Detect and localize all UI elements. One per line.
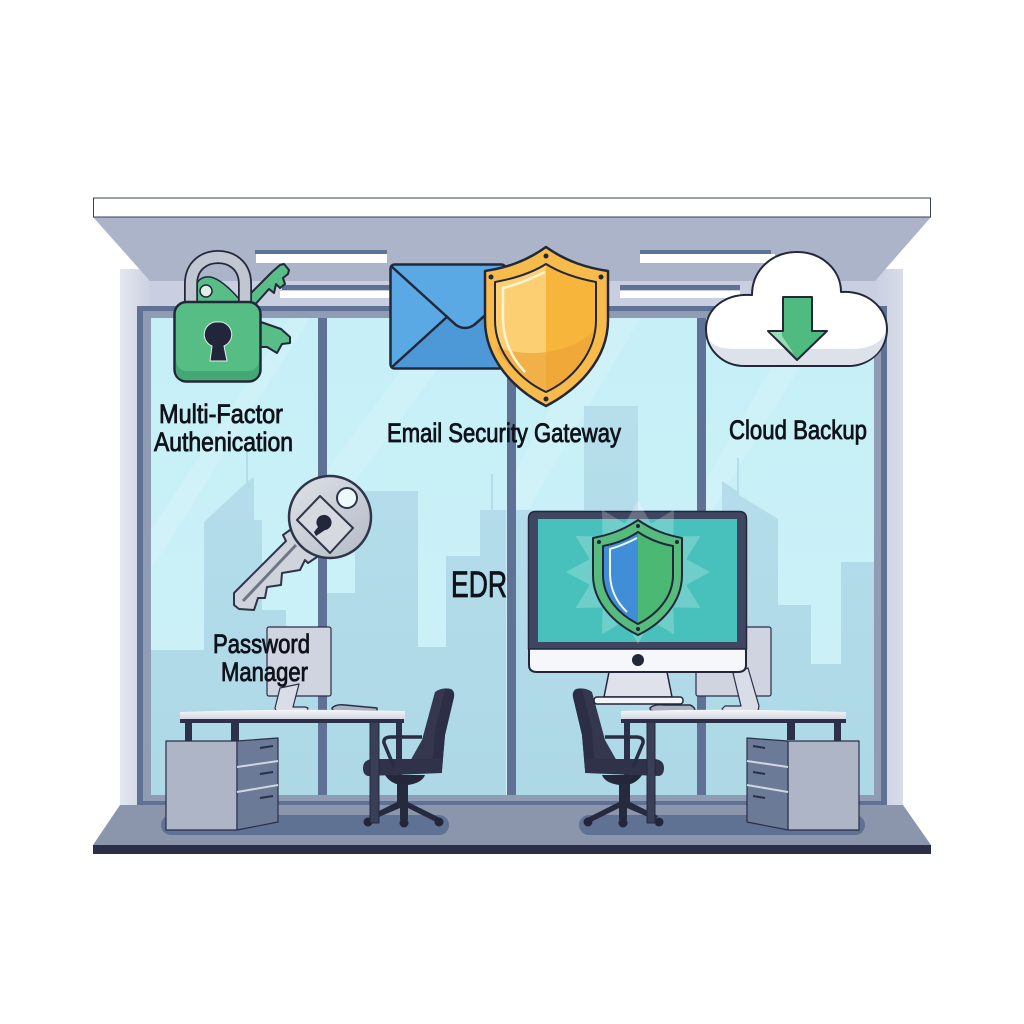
- shackle: [191, 257, 245, 304]
- label: multi-factor authentication: [154, 399, 293, 457]
- envelope fold lines: [392, 316, 448, 367]
- shield highlight: [610, 538, 637, 612]
- key ring hole: [337, 488, 357, 508]
- shield outer: [485, 247, 608, 406]
- cloud: [706, 252, 887, 366]
- desk underside: [621, 719, 846, 723]
- icon: cloud backup: [706, 252, 887, 366]
- desk back legs: [185, 722, 402, 782]
- burst glow: [566, 500, 710, 644]
- chair backrest: [405, 688, 454, 770]
- lower green key: [258, 321, 290, 353]
- icon: monitor with shield: [528, 500, 746, 704]
- lock shading: [176, 360, 259, 380]
- chair wheels: [364, 818, 444, 828]
- label: email security gateway: Email Security Gateway: [387, 418, 621, 448]
- back of monitor: [267, 627, 331, 696]
- chair backrest side: [432, 689, 454, 770]
- floor front edge: [93, 845, 931, 854]
- key keyhole: [314, 515, 332, 536]
- key head: [289, 476, 371, 558]
- label: EDR: EDR: [451, 564, 507, 605]
- shield outer: [593, 520, 682, 635]
- key blade: [234, 530, 320, 610]
- keyboard and mouse: [332, 705, 377, 711]
- monitor screen: [538, 519, 737, 642]
- shield highlight: [503, 272, 545, 372]
- desk top: [621, 710, 846, 719]
- inner window frame: [143, 311, 881, 801]
- chair seat base: [602, 775, 642, 785]
- office room: [93, 198, 931, 854]
- window mullions: [318, 318, 706, 795]
- filing cabinet: [166, 738, 278, 830]
- city skyline: [151, 406, 874, 795]
- ceiling lights: [255, 250, 775, 298]
- shield green half: [638, 532, 673, 624]
- key blade groove: [243, 545, 296, 601]
- shackle outline: [191, 257, 245, 304]
- chair wheels: [584, 818, 664, 828]
- rug shadow: [579, 815, 865, 835]
- monitor chin: [529, 645, 746, 672]
- front desk leg: [370, 722, 379, 823]
- label: cloud backup: Cloud Backup: [729, 415, 867, 445]
- shield inner outline: [495, 264, 596, 392]
- icon: email with shield: [390, 247, 608, 406]
- camera button: [632, 654, 644, 666]
- chair column and legs: [369, 784, 440, 823]
- envelope flap: [391, 266, 505, 328]
- right workstation: [573, 627, 865, 835]
- cloud shading: [708, 333, 885, 365]
- shield inner left half: [495, 264, 546, 392]
- monitor bezel: [528, 512, 746, 649]
- window frame: [137, 306, 887, 806]
- rug shadow: [161, 815, 449, 835]
- monitor stand: [722, 668, 759, 711]
- window glass: [151, 318, 874, 795]
- left wall: [120, 269, 150, 809]
- envelope lower panels: [392, 300, 505, 367]
- front desk leg: [647, 722, 655, 823]
- key lock plate: [297, 496, 353, 553]
- chair: [573, 688, 664, 828]
- label: password manager: [213, 629, 310, 687]
- chair armrest: [605, 737, 643, 767]
- right wall: [875, 269, 903, 809]
- chair armrest: [384, 737, 422, 767]
- monitor base: [594, 697, 683, 704]
- label line 1: Multi-Factor: [159, 399, 283, 429]
- floor: [93, 805, 931, 845]
- label line 2: Authenication: [154, 427, 293, 457]
- roof slab: [94, 198, 930, 217]
- envelope: [390, 264, 506, 368]
- desk underside: [180, 719, 404, 723]
- shield rivets: [488, 254, 604, 402]
- label line 1: Password: [213, 629, 310, 659]
- chair backrest side: [573, 689, 595, 770]
- monitor stand: [275, 684, 308, 711]
- desk top: [180, 710, 405, 719]
- glass reflections: [151, 318, 830, 570]
- icon: padlock with keys: [174, 257, 290, 382]
- chair seat: [585, 759, 664, 776]
- key head behind shackle: [196, 277, 240, 303]
- arrow highlight: [770, 332, 794, 354]
- shield inner outline: [603, 532, 673, 624]
- chair column and legs: [587, 784, 658, 823]
- filing cabinet: [747, 738, 859, 830]
- chair seat: [363, 759, 442, 776]
- keyhole: [204, 322, 232, 361]
- left workstation: [161, 627, 454, 835]
- shield lower shade: [495, 330, 594, 392]
- ceiling: [93, 217, 931, 281]
- lock body: [174, 302, 260, 382]
- chair backrest: [573, 688, 622, 770]
- chair: [363, 688, 454, 828]
- key head hole: [200, 285, 212, 297]
- desk back legs: [624, 722, 841, 782]
- keyboard and mouse: [650, 705, 695, 711]
- shield rivets: [597, 524, 679, 631]
- shield blue half: [603, 532, 638, 624]
- chair seat base: [385, 775, 425, 785]
- monitor stand: [604, 672, 672, 697]
- upper wall band: [150, 269, 875, 309]
- back of monitor: [696, 627, 771, 696]
- shield inner right half: [546, 264, 596, 392]
- upper green key: [248, 264, 289, 308]
- icon: silver key: [234, 476, 371, 610]
- download arrow: [768, 297, 827, 360]
- label line 2: Manager: [221, 657, 308, 687]
